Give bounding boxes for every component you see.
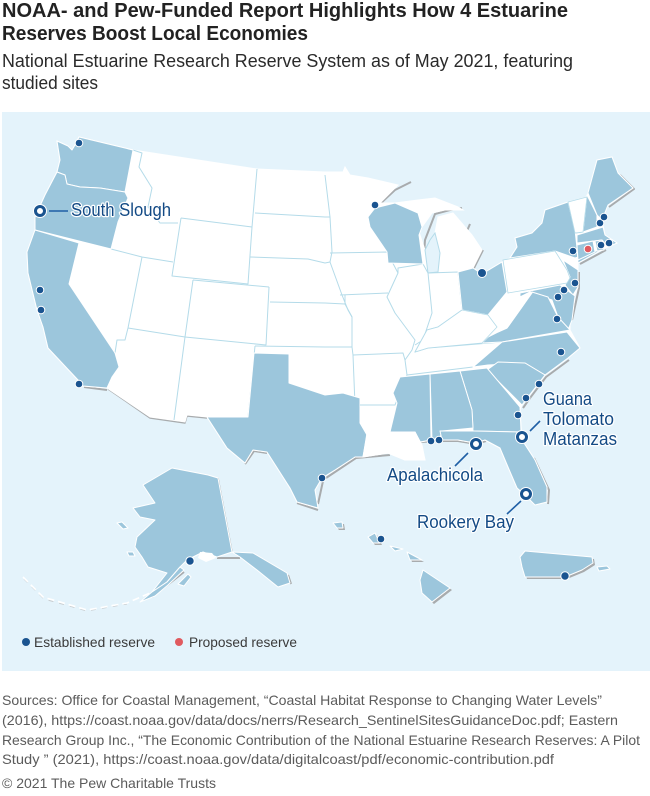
- sources: Research Group Inc., “The Economic Contribution of the National Estuarine Research Reserves: A Pilot: [2, 732, 640, 748]
- lake michigan: [425, 233, 440, 273]
- callout: Guana Tolomato Matanzas: Matanzas: [543, 429, 617, 449]
- white state: Vermont: [568, 197, 587, 233]
- legend: [22, 634, 297, 650]
- state borders: [111, 150, 587, 423]
- map: contiguous United States: [27, 137, 634, 510]
- callout: Guana Tolomato Matanzas: Tolomato: [543, 409, 614, 429]
- callout: South Slough: [33, 200, 171, 220]
- sources: (2016), https://coast.noaa.gov/data/docs/nerrs/Research_SentinelSitesGuidanceDoc.pdf; Eastern: [2, 712, 618, 728]
- callout: Apalachicola: Apalachicola: [387, 465, 484, 485]
- site markers: established reserves: [36, 139, 613, 580]
- site marker: proposed reserve: [584, 245, 592, 253]
- title: [2, 0, 568, 45]
- callout: Guana Tolomato Matanzas: Guana: [543, 389, 593, 409]
- callout: Guana Tolomato Matanzas: [515, 389, 617, 449]
- legend: Proposed reserve: [189, 634, 297, 650]
- map: Puerto Rico: [520, 551, 610, 579]
- panel: map background: [2, 112, 650, 671]
- white state: Kentucky: [415, 310, 497, 352]
- state line: Mississippi-Arkansas side: [360, 404, 395, 406]
- callout: South Slough: South Slough: [71, 200, 171, 220]
- white state: Pennsylvania: [503, 251, 570, 293]
- callout: Rookery Bay: [417, 487, 533, 532]
- callout: Rookery Bay: Rookery Bay: [417, 512, 514, 532]
- studied states: blue fills: [27, 137, 633, 508]
- subtitle: National Estuarine Research Reserve System as of May 2021, featuring: [2, 50, 573, 71]
- coastline and border shadows: [84, 175, 634, 510]
- sources: Study ” (2021), https://coast.noaa.gov/data/digitalcoast/pdf/economic-contribution.pdf: [2, 751, 554, 767]
- white state: West Virginia: [488, 292, 532, 332]
- land base: white states: [27, 137, 633, 508]
- subtitle: studied sites: [2, 72, 98, 93]
- map: Alaska: [23, 468, 291, 611]
- sources: Sources: Office for Coastal Management, “Coastal Habitat Response to Changing Water Levels”: [2, 692, 602, 708]
- callout: Apalachicola: [387, 437, 484, 485]
- map: Hawaii: [333, 522, 452, 604]
- copyright: © 2021 The Pew Charitable Trusts: [2, 775, 216, 791]
- title: Reserves Boost Local Economies: [2, 22, 308, 45]
- subtitle: [2, 50, 573, 93]
- white state: Louisiana: [360, 405, 425, 460]
- sources: [2, 692, 640, 767]
- legend: Established reserve: [34, 634, 155, 650]
